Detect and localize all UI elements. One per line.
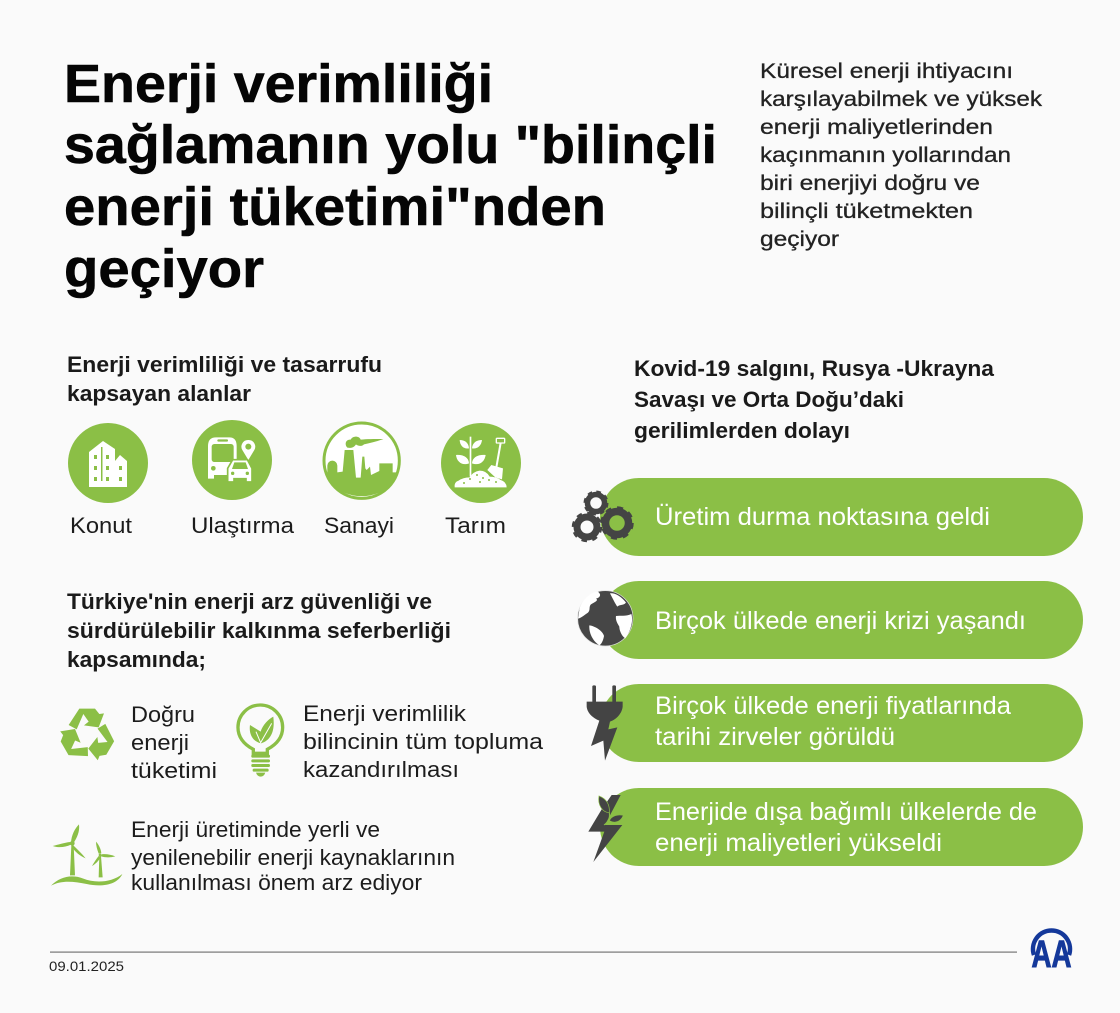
text: awareness [303, 701, 544, 782]
intro text: biri enerjiyi doğru ve [760, 172, 980, 195]
icon: globe [578, 591, 633, 646]
text: correct consumption: enerji [131, 730, 189, 755]
heading: Turkey: Türkiye'nin enerji arz güvenliği ve [67, 589, 432, 614]
title: geçiyor [64, 239, 264, 299]
heading: Turkey: kapsamında; [67, 647, 206, 672]
logo: Anadolu Agency: AA [1032, 934, 1072, 976]
logo: Anadolu Agency [1032, 931, 1072, 976]
heading: crisis [634, 356, 994, 443]
date: 09.01.2025 [49, 958, 124, 974]
pill: crisis: Birçok ülkede enerji krizi yaşandı [655, 607, 1026, 635]
text: correct consumption: tüketimi [131, 758, 217, 783]
label: Tarım: Tarım [445, 513, 506, 538]
pill: import dependent: enerji maliyetleri yükseldi [655, 829, 942, 857]
intro text [760, 60, 1043, 251]
icon: bolt with leaves [588, 795, 623, 862]
icon: gears [574, 492, 632, 540]
text: awareness: kazandırılması [303, 757, 459, 782]
heading: crisis: gerilimlerden dolayı [634, 418, 850, 443]
title: Enerji verimliliği [64, 54, 493, 114]
text: awareness: Enerji verimlilik [303, 701, 467, 726]
pill: prices [600, 684, 1083, 762]
text: renewable sources: Enerji üretiminde yerli ve [131, 817, 380, 842]
text: renewable sources [131, 817, 455, 895]
intro text: geçiyor [760, 228, 839, 251]
intro text: kaçınmanın yollarından [760, 144, 1011, 167]
heading: areas: Enerji verimliliği ve tasarrufu [67, 352, 382, 377]
heading: crisis: Savaşı ve Orta Doğu’daki [634, 387, 904, 412]
pill: prices: Birçok ülkede enerji fiyatlarında [655, 692, 1011, 720]
intro text: bilinçli tüketmekten [760, 200, 973, 223]
pill: crisis [600, 581, 1083, 659]
label: Sanayi: Sanayi [324, 513, 394, 538]
icon: industry [324, 423, 399, 498]
pill: prices: tarihi zirveler görüldü [655, 723, 895, 751]
heading: Turkey: sürdürülebilir kalkınma seferberliği [67, 618, 451, 643]
heading: areas [67, 352, 382, 406]
icon: plug with bolt [587, 685, 623, 761]
icon: transport [192, 420, 272, 500]
pill: import dependent [600, 788, 1083, 866]
label: Ulaştırma: Ulaştırma [191, 513, 295, 538]
title: enerji tüketimi"nden [64, 177, 606, 237]
heading: crisis: Kovid-19 salgını, Rusya -Ukrayna [634, 356, 994, 381]
text: correct consumption: Doğru [131, 702, 195, 727]
icon: recycling [56, 709, 119, 764]
icon: housing [68, 423, 148, 503]
heading: areas: kapsayan alanlar [67, 381, 251, 406]
icon: agriculture [441, 423, 521, 503]
text: correct consumption [131, 702, 217, 783]
intro text: Küresel enerji ihtiyacını [760, 60, 1013, 83]
text: awareness: bilincinin tüm topluma [303, 729, 544, 754]
label: Konut: Konut [70, 513, 133, 538]
panel: crisis effects [574, 356, 1083, 866]
panel: energy efficiency areas [67, 352, 521, 538]
icon: wind turbines [51, 824, 122, 886]
title: sağlamanın yolu "bilinçli [64, 115, 717, 175]
text: renewable sources: yenilenebilir enerji kaynaklarının [131, 845, 455, 870]
footer rule [50, 952, 1017, 953]
text: renewable sources: kullanılması önem arz ediyor [131, 870, 423, 895]
pill: production [600, 478, 1083, 556]
title [64, 54, 717, 299]
panel: Turkey mobilisation [51, 589, 544, 895]
intro text: karşılayabilmek ve yüksek [760, 88, 1043, 111]
pill: production: Üretim durma noktasına geldi [655, 503, 990, 531]
heading: Turkey [67, 589, 451, 672]
pill: import dependent: Enerjide dışa bağımlı ülkelerde de [655, 798, 1037, 826]
intro text: enerji maliyetlerinden [760, 116, 993, 139]
icon: bulb with leaf [238, 705, 283, 777]
